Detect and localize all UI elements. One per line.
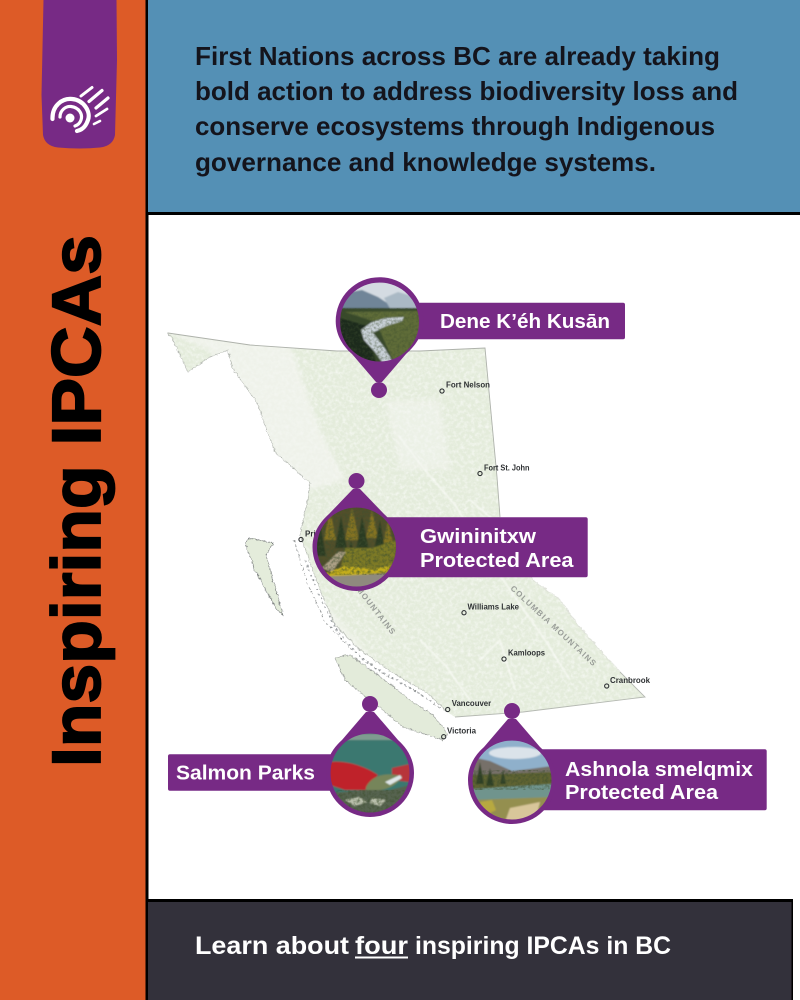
- panel: footer call to action: [148, 899, 793, 1000]
- mountain labels: COLUMBIA MOUNTAINS: [509, 584, 599, 669]
- panel: orange sidebar: [0, 0, 146, 1000]
- callout: Dene K'éh Kusān: [336, 277, 625, 398]
- mainland: [160, 330, 660, 730]
- photo: forest lakeshore: [317, 508, 396, 586]
- intro text: First Nations across BC are already taking: [195, 41, 720, 71]
- mountain labels: [331, 556, 599, 669]
- Haida Gwaii: [245, 538, 283, 615]
- city labels: Williams Lake: [468, 602, 520, 612]
- footer text: inspiring IPCAs in BC: [415, 932, 671, 960]
- photo: river valley: [340, 282, 420, 365]
- photo: sockeye salmon: [330, 733, 410, 815]
- label: Salmon Parks: [176, 762, 315, 784]
- intro text: conserve ecosystems through Indigenous: [195, 111, 715, 141]
- mountain labels: COAST MOUNTAINS: [331, 556, 398, 637]
- footer text: four: [355, 932, 408, 960]
- label: [380, 517, 588, 577]
- city labels: Kamloops: [508, 648, 546, 658]
- pin: [312, 473, 400, 591]
- label: [400, 303, 625, 339]
- label: Protected Area: [565, 782, 719, 804]
- pin: [468, 703, 556, 824]
- intro text: bold action to address biodiversity loss and: [195, 76, 738, 106]
- city labels: Victoria: [447, 726, 477, 736]
- city labels: Vancouver: [452, 699, 491, 708]
- city labels: Fort St. John: [484, 464, 530, 472]
- city labels: Prince Rupert: [305, 530, 358, 538]
- footer text: Learn about: [195, 932, 350, 960]
- Vancouver Island: [335, 655, 447, 740]
- intro text: [195, 41, 738, 177]
- label: [168, 754, 343, 791]
- callout: Salmon Parks: [168, 696, 414, 817]
- icon: bear paw: [52, 88, 108, 131]
- panel: intro banner: [148, 0, 800, 215]
- label: Ashnola smelqmix: [565, 759, 753, 781]
- label: Protected Area: [420, 550, 574, 572]
- callout: Gwininitxw Protected Area: [312, 473, 588, 591]
- city labels: Cranbrook: [610, 676, 651, 685]
- city labels: [299, 380, 651, 739]
- label: [530, 749, 767, 810]
- label: Gwininitxw: [420, 526, 536, 548]
- city labels: Fort Nelson: [446, 380, 490, 390]
- vertical title: Inspiring IPCAs: [38, 235, 115, 767]
- pin: [336, 277, 423, 398]
- logo tab with paw icon: [42, 0, 117, 148]
- callout: Ashnola smelqmix Protected Area: [468, 703, 767, 824]
- photo: mountain lake: [472, 740, 555, 822]
- intro text: governance and knowledge systems.: [195, 147, 656, 177]
- label: Dene K’éh Kusān: [440, 311, 610, 333]
- footer text: [195, 932, 671, 960]
- map of British Columbia: [160, 330, 660, 740]
- pin: [326, 696, 414, 817]
